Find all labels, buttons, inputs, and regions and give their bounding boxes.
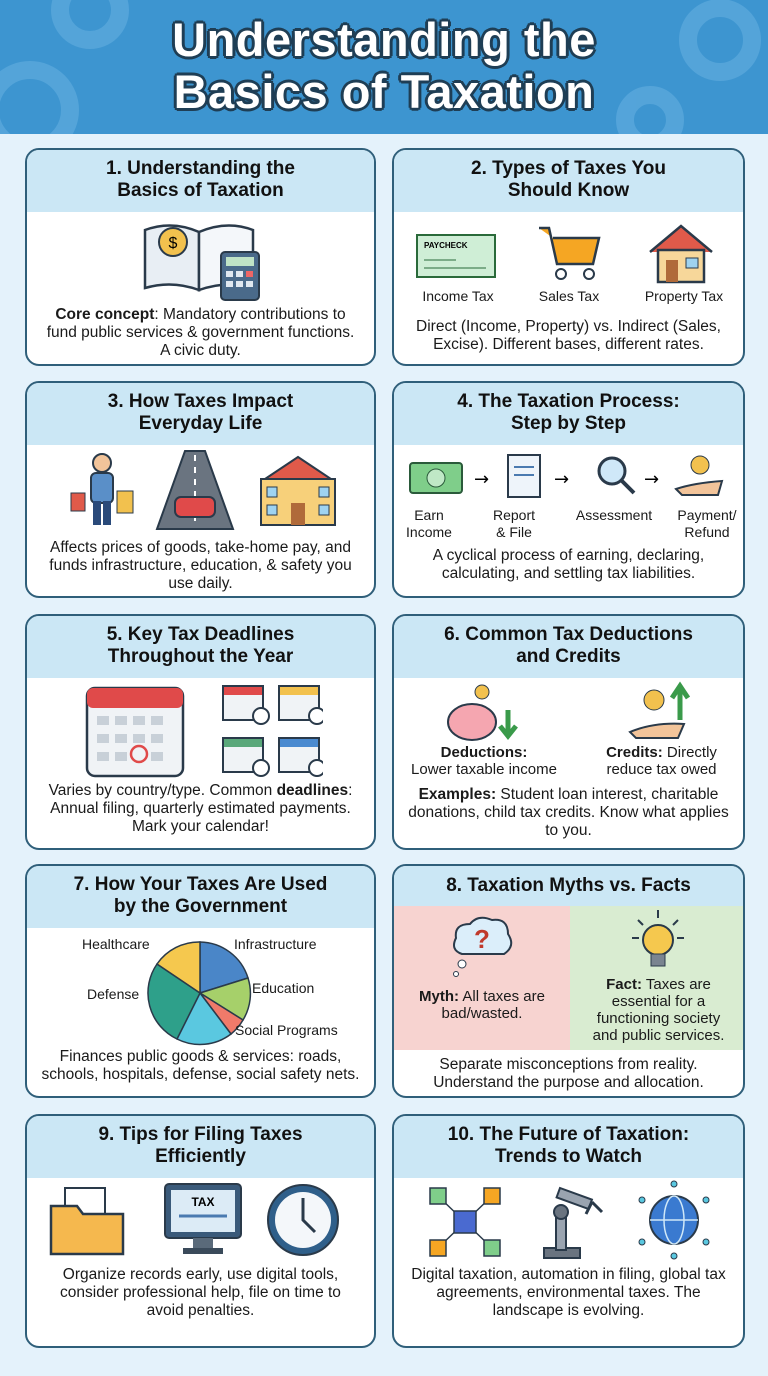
process icons: → <box>644 469 659 490</box>
text 5: Varies by country/type. Common deadlines: Annual filing, quarterly estimated payments. Mark your calendar! <box>49 782 352 835</box>
deductions label: Lower taxable income <box>411 761 557 778</box>
process icons: → <box>474 469 489 490</box>
panel 4: Payment/ <box>677 507 737 523</box>
panel 4 <box>392 381 745 598</box>
myth column <box>394 906 570 1050</box>
panel 7: Social Programs <box>235 1022 338 1038</box>
credits label <box>606 744 717 778</box>
heading 5: 5. Key Tax Deadlines <box>107 624 294 645</box>
icon: thought cloud: ? <box>474 924 490 954</box>
text 10: Digital taxation, automation in filing, global tax agreements, environmental taxes. The landscape is evolving. <box>411 1266 726 1319</box>
icon: piggy bank <box>447 684 518 741</box>
icon: thought cloud <box>453 916 512 977</box>
credits label: Credits: Directly <box>606 744 717 761</box>
heading 1 <box>27 150 374 212</box>
deductions label <box>411 744 557 778</box>
icon: cart <box>539 226 601 280</box>
icon: folder <box>50 1187 124 1256</box>
heading 9: 9. Tips for Filing Taxes <box>98 1124 303 1145</box>
heading 4: 4. The Taxation Process: <box>457 391 680 412</box>
labels: Income Tax <box>422 288 494 304</box>
text 6: Examples: Student loan interest, charitable donations, child tax credits. Know what applies to you. <box>408 786 729 839</box>
heading 2: 2. Types of Taxes You <box>471 158 666 179</box>
icon: robot arm <box>543 1186 603 1259</box>
panel 7 <box>25 864 376 1098</box>
icon: monitor tax <box>164 1183 242 1254</box>
panel 1 <box>25 148 376 366</box>
icon: blockchain cubes <box>429 1187 501 1257</box>
fact text <box>593 976 724 1044</box>
text 4: A cyclical process of earning, declaring, calculating, and settling tax liabilities. <box>433 547 704 582</box>
banner <box>0 0 768 134</box>
fact text: functioning society <box>597 1010 720 1027</box>
heading 7: 7. How Your Taxes Are Used <box>74 874 327 895</box>
icon: light bulb <box>632 910 684 966</box>
panel 9 <box>25 1114 376 1348</box>
icon: paycheck: PAYCHECK <box>424 241 468 250</box>
heading 7: by the Government <box>114 896 287 917</box>
heading 6 <box>394 616 743 678</box>
pie labels: Healthcare <box>82 936 150 952</box>
heading 7 <box>27 866 374 928</box>
panel 5 <box>25 614 376 850</box>
step labels <box>406 507 452 540</box>
panel 8 <box>392 864 745 1098</box>
heading 2 <box>394 150 743 212</box>
icon: shopper <box>70 453 134 525</box>
heading 5: Throughout the Year <box>108 646 293 667</box>
panel 4: Assessment <box>576 507 652 523</box>
panel 4: Refund <box>684 524 730 540</box>
title <box>172 13 597 118</box>
panel 2: Property Tax <box>645 288 723 304</box>
heading 3: 3. How Taxes Impact <box>108 391 293 412</box>
heading 5 <box>27 616 374 678</box>
heading 10 <box>394 1116 743 1178</box>
pie chart <box>147 941 252 1046</box>
heading 1: 1. Understanding the <box>106 158 295 179</box>
fact text: and public services. <box>593 1027 724 1044</box>
panel 7: Infrastructure <box>234 936 316 952</box>
text 3: Affects prices of goods, take-home pay, and funds infrastructure, education, & safety you use daily. <box>49 539 352 592</box>
heading 4 <box>394 383 743 445</box>
icon: monitor tax: TAX <box>191 1195 215 1209</box>
panel 7: Defense <box>87 986 139 1002</box>
credits label: reduce tax owed <box>606 761 717 778</box>
panel 6 <box>392 614 745 850</box>
panel 4: & File <box>496 524 532 540</box>
heading 6: and Credits <box>516 646 621 667</box>
fact column <box>570 906 747 1050</box>
icon: school <box>260 456 336 526</box>
icon: road and car <box>156 450 234 530</box>
title: Understanding the <box>172 13 596 66</box>
text 8: Separate misconceptions from reality. Understand the purpose and allocation. <box>433 1056 704 1091</box>
text 1: Core concept: Mandatory contributions to fund public services & government functions. A civic duty. <box>47 306 354 359</box>
panel 10 <box>392 1114 745 1348</box>
heading 8 <box>394 866 743 906</box>
icon: calendars <box>86 685 323 778</box>
icon: house <box>649 224 713 284</box>
fact text: essential for a <box>612 993 705 1010</box>
heading 9 <box>27 1116 374 1178</box>
heading 6: 6. Common Tax Deductions <box>444 624 693 645</box>
icon: clock <box>267 1184 339 1256</box>
fact text: Fact: Taxes are <box>606 976 711 993</box>
myth text <box>419 988 545 1022</box>
step labels: Earn <box>414 507 444 523</box>
icon: globe network <box>638 1180 710 1260</box>
heading 1: Basics of Taxation <box>117 180 284 201</box>
text 9: Organize records early, use digital tools, consider professional help, file on time to avoid penalties. <box>60 1266 341 1319</box>
heading 8: 8. Taxation Myths vs. Facts <box>446 875 691 896</box>
myth text: bad/wasted. <box>442 1005 522 1022</box>
panel 2: Sales Tax <box>539 288 599 304</box>
heading 3 <box>27 383 374 445</box>
icon: book and calculator: $ <box>169 235 178 252</box>
heading 3: Everyday Life <box>139 413 262 434</box>
heading 4: Step by Step <box>511 413 626 434</box>
process icons <box>409 454 724 498</box>
heading 10: 10. The Future of Taxation: <box>448 1124 689 1145</box>
text 2: Direct (Income, Property) vs. Indirect (Sales, Excise). Different bases, different rates. <box>416 318 721 353</box>
deductions label: Deductions: <box>441 744 527 761</box>
icon: book and calculator <box>144 224 260 301</box>
heading 2: Should Know <box>508 180 629 201</box>
heading 10: Trends to Watch <box>495 1146 642 1167</box>
heading 9: Efficiently <box>155 1146 246 1167</box>
text 7: Finances public goods & services: roads, schools, hospitals, defense, social safety nets. <box>42 1048 359 1083</box>
panel 7: Education <box>252 980 314 996</box>
myth text: Myth: All taxes are <box>419 988 545 1005</box>
icon: paycheck <box>416 234 496 278</box>
panel 2 <box>392 148 745 366</box>
title: Basics of Taxation <box>174 65 594 118</box>
panel 4: Report <box>493 507 535 523</box>
icon: hand with coin <box>628 682 690 739</box>
step labels: Income <box>406 524 452 540</box>
process icons: → <box>554 469 569 490</box>
panel 3 <box>25 381 376 598</box>
